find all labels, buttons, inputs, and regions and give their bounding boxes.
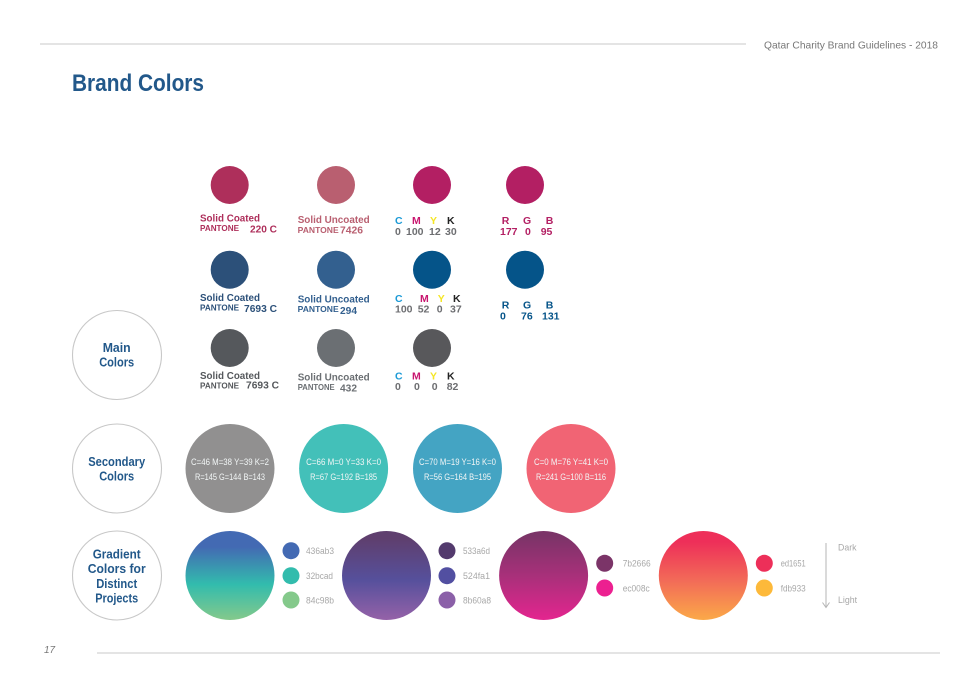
main colors: grey row: C [395, 370, 403, 382]
main colors: burgundy row: PANTONE [200, 223, 239, 233]
main colors: burgundy row: K [447, 215, 455, 227]
gradient: dark purple to violet [342, 531, 491, 620]
main colors: navy row: Y [438, 293, 445, 305]
secondary colors: label circle [72, 424, 162, 513]
arrow: dark to light legend: Dark [838, 542, 857, 552]
main colors: grey row: 432 [340, 383, 357, 395]
main colors: navy row: Solid Uncoated [298, 294, 370, 306]
gradient: blue to green: 32bcad [306, 571, 333, 581]
gradient: dark purple to violet: 524fa1 [463, 571, 490, 581]
main colors: burgundy row: 0 [525, 226, 531, 238]
main colors: navy row [200, 251, 560, 322]
main colors: burgundy row: M [412, 215, 421, 227]
arrow: dark to light legend: Light [838, 595, 858, 605]
main colors: navy row: B [546, 300, 554, 312]
gradient colors: label circle: Projects [95, 592, 138, 606]
title: Brand Colors [72, 70, 204, 97]
gradient colors: label circle: Colors for [88, 562, 146, 576]
gradient: plum to magenta [499, 531, 651, 620]
main colors: burgundy row [200, 166, 554, 238]
secondary colors: blue swatch: C=70 M=19 Y=16 K=0 [419, 457, 496, 468]
secondary colors: coral swatch: R=241 G=100 B=116 [536, 472, 606, 483]
main colors: navy row: PANTONE [298, 304, 339, 314]
main colors: grey row: Y [430, 370, 437, 382]
main colors: burgundy row: Solid Coated [200, 212, 260, 224]
gradient: blue to green: 84c98b [306, 596, 334, 606]
main colors: grey row: M [412, 370, 421, 382]
main colors: burgundy row: 177 [500, 226, 518, 238]
gradient: red to amber: ed1651 [781, 558, 806, 568]
secondary colors: teal swatch: R=67 G=192 B=185 [310, 472, 377, 483]
header: rule and document name: Qatar Charity Brand Guidelines - 2018 [764, 40, 938, 52]
main colors: burgundy row: 12 [429, 226, 441, 238]
gradient colors: label circle: Gradient [93, 548, 141, 562]
main colors: burgundy row: 7426 [340, 224, 363, 236]
secondary colors: teal swatch: C=66 M=0 Y=33 K=0 [306, 457, 381, 468]
main colors: burgundy row: Y [430, 215, 437, 227]
main colors: burgundy row: Solid Uncoated [298, 214, 370, 226]
main colors: burgundy row: G [523, 215, 531, 227]
secondary colors: label circle: Colors [99, 470, 134, 484]
main colors: burgundy row: C [395, 215, 403, 227]
gradient: plum to magenta: ec008c [623, 584, 650, 594]
main colors: navy row: M [420, 293, 429, 305]
main colors: grey row: K [447, 370, 455, 382]
gradient: blue to green: 436ab3 [306, 546, 334, 556]
main colors: burgundy row: 30 [445, 226, 457, 238]
footer: page number and rule: 17 [44, 645, 56, 656]
gradient: blue to green [186, 531, 334, 620]
gradient: dark purple to violet: 8b60a8 [463, 596, 491, 606]
secondary colors: blue swatch [413, 424, 502, 513]
main colors: grey row: 0 [414, 381, 420, 393]
main colors: navy row: 52 [418, 304, 430, 316]
secondary colors: grey swatch: R=145 G=144 B=143 [195, 472, 265, 483]
main colors: burgundy row: 100 [406, 226, 424, 238]
gradient colors: label circle: Distinct [96, 577, 138, 591]
main colors: navy row: C [395, 293, 403, 305]
gradient: red to amber: fdb933 [781, 584, 806, 594]
gradient: dark purple to violet: 533a6d [463, 546, 490, 556]
main colors: navy row: 131 [542, 310, 560, 322]
gradient: plum to magenta: 7b2666 [623, 558, 651, 568]
main colors: burgundy row: R [502, 215, 510, 227]
secondary colors: coral swatch: C=0 M=76 Y=41 K=0 [534, 457, 608, 468]
main colors: navy row: 37 [450, 304, 462, 316]
secondary colors: label circle: Secondary [88, 455, 145, 469]
main colors: navy row: 0 [437, 304, 443, 316]
main colors: navy row: Solid Coated [200, 292, 260, 304]
main colors: navy row: G [523, 300, 531, 312]
main colors: navy row: 76 [521, 310, 533, 322]
main colors: navy row: 100 [395, 304, 413, 316]
main colors: navy row: 0 [500, 310, 506, 322]
secondary colors: grey swatch: C=46 M=38 Y=39 K=2 [191, 457, 269, 468]
main colors: navy row: R [502, 300, 510, 312]
main colors: grey row: 82 [447, 381, 459, 393]
main colors: burgundy row: 220 C [250, 224, 277, 236]
main colors: navy row: PANTONE [200, 303, 239, 313]
secondary colors: coral swatch [526, 424, 616, 513]
main colors: grey row: Solid Coated [200, 370, 260, 382]
main colors: burgundy row: B [546, 215, 554, 227]
secondary colors: blue swatch: R=56 G=164 B=195 [424, 472, 491, 483]
gradient: red to amber [659, 531, 806, 620]
main colors: grey row: PANTONE [200, 381, 239, 391]
main colors: navy row: K [453, 293, 461, 305]
main colors: label circle: Main [103, 341, 131, 355]
secondary colors: grey swatch [186, 424, 274, 513]
main colors: label circle: Colors [99, 356, 134, 370]
arrow: dark to light legend [822, 542, 858, 608]
main colors: label circle [72, 310, 162, 400]
main colors: navy row: 7693 C [244, 303, 277, 315]
main colors: burgundy row: PANTONE [298, 225, 339, 235]
main colors: burgundy row: 0 [395, 226, 401, 238]
main colors: grey row: Solid Uncoated [298, 372, 370, 384]
gradient colors: label circle [72, 531, 162, 620]
secondary colors: teal swatch [299, 424, 388, 513]
main colors: grey row: PANTONE [298, 382, 335, 392]
main colors: grey row [200, 329, 459, 395]
main colors: grey row: 7693 C [246, 380, 279, 392]
main colors: navy row: 294 [340, 305, 357, 317]
main colors: grey row: 0 [432, 381, 438, 393]
main colors: burgundy row: 95 [541, 226, 553, 238]
main colors: grey row: 0 [395, 381, 401, 393]
